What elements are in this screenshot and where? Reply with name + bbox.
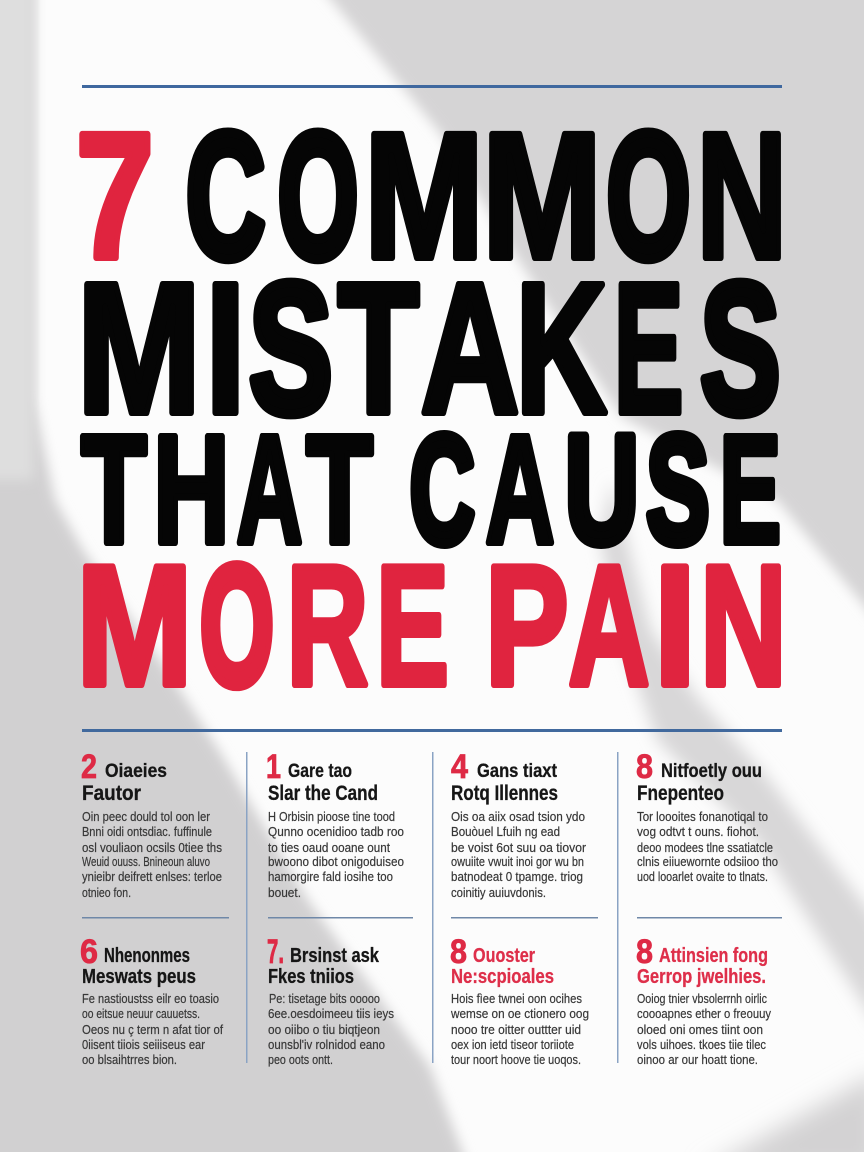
title line 2: MISTAKES: I — [206, 246, 246, 452]
heading: Rotq Illennes — [451, 782, 558, 805]
panel: item row 1 column 2 — [266, 748, 404, 900]
title line 4: MORE PAIN: N — [700, 530, 787, 722]
heading: Gare tao — [288, 761, 352, 782]
body text: oo eitsue neuur cauuetss. — [82, 1006, 200, 1021]
heading: Brsinst ask — [290, 945, 380, 967]
body text: Oeos nu ç term n afat tior of — [82, 1022, 223, 1037]
body text: oinoo ar our hoatt tione. — [637, 1052, 758, 1067]
body text: bwoono dibot onigoduiseo — [268, 854, 404, 869]
heading: Fnepenteo — [637, 782, 724, 805]
title line 3: THAT CAUSE: A — [236, 404, 302, 576]
body text: tour noort hoove tie uoqos. — [451, 1052, 581, 1067]
heading — [637, 945, 768, 988]
title line 3: THAT CAUSE: A — [486, 404, 554, 576]
title line 4: MORE PAIN: R — [287, 530, 368, 722]
top rule — [82, 85, 782, 88]
heading: Ne:scpioales — [451, 966, 554, 988]
heading: Fkes tniios — [268, 966, 354, 988]
heading — [451, 945, 554, 988]
title line 4: MORE PAIN: I — [654, 530, 696, 722]
body text: otnieo fon. — [82, 885, 131, 900]
body text — [268, 809, 404, 900]
title — [76, 96, 787, 722]
heading: Gans tiaxt — [477, 761, 558, 782]
heading — [451, 761, 558, 805]
body text — [637, 991, 771, 1067]
panel: item row 2 column 1 — [80, 933, 223, 1067]
body text: Bnni oidi ontsdiac. fuffinule — [82, 824, 212, 839]
body text: Fe nastioustss eilr eo toasio — [82, 991, 219, 1006]
heading — [82, 945, 196, 988]
row dividers — [82, 917, 782, 918]
number: 4 — [451, 748, 468, 786]
panel: item row 2 column 3 — [450, 933, 589, 1067]
heading: Meswats peus — [82, 966, 196, 988]
heading: Nitfoetly ouu — [661, 761, 762, 782]
body text: Qunno ocenidioo tadb roo — [268, 824, 404, 839]
body text: oex ion ietd tiseor toriiote — [451, 1037, 574, 1052]
body text: 6ee.oesdoimeeu tiis ieys — [268, 1006, 394, 1021]
body text: nooo tre oitter outtter uid — [451, 1022, 581, 1037]
panel: item row 1 column 1 — [81, 748, 222, 900]
title line 2: MISTAKES: S — [700, 246, 780, 452]
title line 3: THAT CAUSE: H — [153, 404, 230, 576]
heading: Ouoster — [473, 945, 535, 967]
title line 4: MORE PAIN: O — [200, 530, 274, 722]
title line 1: 7 COMMON: N — [697, 96, 787, 296]
body text: hamorgire fald iosihe too — [268, 869, 393, 884]
body text: oo blsaihtrres bion. — [82, 1052, 177, 1067]
number: 8 — [636, 933, 653, 971]
title line 3: THAT CAUSE: U — [565, 404, 639, 576]
title line 1: 7 COMMON: M — [364, 96, 484, 296]
body text: coooapnes ether o freouuy — [637, 1006, 771, 1021]
title line 2: MISTAKES: S — [249, 246, 333, 452]
body text: Pe: tisetage bits ooooo — [269, 991, 380, 1006]
body text: wemse on oe ctionero oog — [450, 1006, 589, 1021]
number: 6 — [80, 933, 98, 971]
body text: H Orbisin pioose tine tood — [268, 809, 395, 824]
body text: Tor loooites fonanotiqal to — [637, 809, 768, 824]
middle rule — [82, 729, 782, 732]
body text: uod looarlet ovaite to tlnats. — [637, 869, 768, 884]
body text — [82, 991, 223, 1067]
body text: osl vouliaon ocsils 0tiee ths — [82, 840, 222, 855]
title line 2: MISTAKES: E — [614, 246, 684, 452]
body text: coinitiy auiuvdonis. — [451, 885, 546, 900]
body text: Oin peec dould tol oon ler — [82, 809, 211, 824]
title line 1: 7 COMMON: M — [482, 96, 602, 296]
title line 2: MISTAKES: K — [516, 246, 607, 452]
body text: ynieibr deifrett enlses: terloe — [82, 869, 222, 884]
body text: oloed oni omes tiint oon — [637, 1022, 763, 1037]
title line 1: 7 COMMON: O — [278, 96, 358, 296]
title line 4: MORE PAIN: P — [485, 530, 568, 722]
title line 2: MISTAKES: T — [338, 246, 419, 452]
heading — [268, 945, 380, 988]
body text: batnodeat 0 tpamge. triog — [451, 869, 583, 884]
body text: ounsbl'iv rolnidod eano — [268, 1037, 385, 1052]
column dividers — [246, 752, 618, 1063]
body text: oo oiibo o tiu biqtjeon — [268, 1022, 380, 1037]
body text: Hois fìee twnei oon ocihes — [451, 991, 582, 1006]
body text — [451, 809, 587, 900]
body text — [637, 809, 778, 884]
heading: Slar the Cand — [268, 782, 378, 805]
panel: item row 1 column 3 — [451, 748, 587, 900]
number: 1 — [266, 748, 281, 786]
title line 2: MISTAKES: M — [77, 246, 201, 452]
title line 4: MORE PAIN: M — [77, 530, 192, 722]
heading: Gerrop jwelhies. — [637, 966, 766, 988]
body text: to ties oaud ooane ount — [268, 840, 390, 855]
body text: 0iisent tiiois seiiiseus ear — [82, 1037, 206, 1052]
number: 8 — [450, 933, 467, 971]
panel: item row 2 column 2 — [267, 933, 394, 1067]
title line 3: THAT CAUSE: E — [719, 404, 781, 576]
heading — [637, 761, 762, 805]
panel: item row 2 column 4 — [636, 933, 771, 1067]
title line 3: THAT CAUSE: T — [81, 404, 147, 576]
number: 7. — [267, 933, 284, 971]
heading: Attinsien fong — [659, 945, 768, 967]
heading: Fautor — [82, 782, 141, 805]
heading: Oiaeies — [105, 761, 167, 782]
body text: Ooiog tnier vbsolerrnh oirlic — [637, 991, 767, 1006]
body text — [268, 991, 394, 1067]
body text — [450, 991, 589, 1067]
heading: Nhenonmes — [104, 945, 190, 967]
title line 4: MORE PAIN: E — [376, 530, 449, 722]
body text: Weuid ouuss. Bnineoun aluvo — [82, 854, 210, 869]
body text: peo oots ontt. — [268, 1052, 333, 1067]
title line 1: 7 COMMON: C — [186, 96, 266, 296]
body text: vols uihoes. tkoes tiie tilec — [637, 1037, 766, 1052]
body text: deoo modees tlne ssatiatcle — [637, 840, 773, 855]
title line 1: 7 COMMON: O — [606, 96, 691, 296]
body text — [82, 809, 222, 900]
title line 3: THAT CAUSE: S — [646, 404, 710, 576]
title line 3: THAT CAUSE: T — [306, 404, 373, 576]
heading — [82, 761, 167, 805]
body text: clnis eiiuewornte odsiioo tho — [637, 854, 778, 869]
title line 4: MORE PAIN: A — [568, 530, 650, 722]
body text: owuiite vwuit inoi gor wu bn — [451, 854, 584, 869]
body text: bouet. — [268, 885, 301, 900]
panel: item row 1 column 4 — [636, 748, 778, 884]
body text: vog odtvt t ouns. fiohot. — [637, 824, 759, 839]
body text: be voist 6ot suu oa tiovor — [451, 840, 587, 855]
number: 8 — [636, 748, 653, 786]
number: 2 — [81, 748, 97, 786]
heading — [268, 761, 378, 805]
body text: Bouòuel Lfuih ng ead — [451, 824, 560, 839]
title line 3: THAT CAUSE: C — [410, 404, 475, 576]
title line 2: MISTAKES: A — [420, 246, 520, 452]
title line 1: 7 COMMON: 7 — [76, 96, 154, 296]
body text: Ois oa aiix osad tsion ydo — [451, 809, 585, 824]
